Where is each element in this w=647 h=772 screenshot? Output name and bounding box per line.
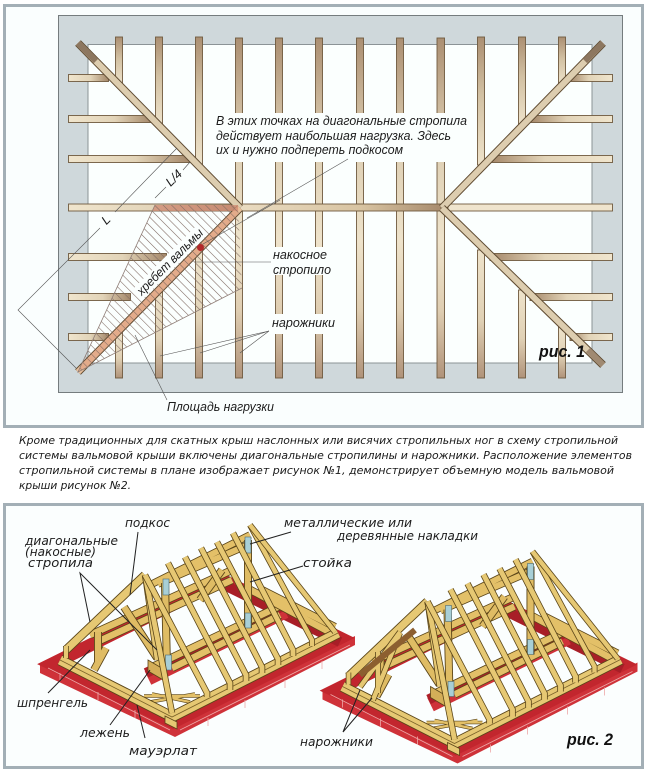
label: plates: деревянные накладки — [336, 529, 478, 543]
label: plates — [250, 516, 478, 544]
rafters — [66, 525, 335, 713]
common rafters, vertical — [116, 37, 566, 378]
label: diagonal rafters — [24, 534, 157, 650]
panel: roof plan — [4, 6, 642, 426]
callout: load points: действует наибольшая нагрузка. Здесь — [216, 129, 451, 143]
ridge beam — [150, 535, 250, 585]
text block: description — [19, 434, 632, 492]
label: post: стойка — [303, 556, 352, 570]
roof outline — [58, 16, 622, 392]
label: creepers: нарожники — [272, 316, 335, 330]
dimension L/4: L/4 — [163, 167, 185, 189]
common rafters, horizontal — [68, 74, 612, 340]
label: creepers in model 2 — [300, 690, 373, 749]
label: truss — [17, 650, 90, 710]
load area hatching — [79, 205, 242, 371]
label: sill: лежень — [79, 726, 130, 740]
label: diagonal rafters: диагональные — [24, 534, 118, 548]
label: diagonal rafters: стропила — [28, 556, 93, 570]
3D roof model 2 — [322, 552, 638, 764]
label: creepers — [160, 314, 336, 356]
label: strut — [125, 516, 170, 595]
brick ring — [40, 636, 355, 737]
callout: load points: В этих точках на диагональные стропила — [216, 114, 467, 128]
label: jack rafter: накосное — [273, 248, 327, 262]
label: plates: металлические или — [284, 516, 412, 530]
label: jack rafter — [195, 247, 331, 277]
figure label 1: рис. 1 — [538, 342, 585, 361]
dimension L: L — [99, 213, 113, 227]
callout: load points: их и нужно подпереть подкосом — [216, 143, 403, 157]
metal plates — [163, 537, 251, 670]
creeper rafters — [360, 630, 415, 700]
3D roof model 1 — [40, 525, 355, 737]
label: load area — [135, 335, 274, 414]
posts and braces — [94, 540, 248, 670]
panel: 3D models — [4, 504, 642, 768]
text block: description: стропильной системы в плане изображает рисунок №1, демонстрирует объемную модель вальмовой — [19, 464, 614, 477]
ridge beam — [240, 204, 441, 211]
text block: description: системы вальмовой крыши включены диагональные стропилины и нарожники. Расположение элементов — [19, 449, 632, 462]
ridge label: hip ridge: хребет вальмы — [133, 226, 206, 299]
text block: description: Кроме традиционных для скатных крыш наслонных или висячих стропильных ног в схему стропильной — [19, 434, 618, 447]
figure label 2: рис. 2 — [566, 730, 614, 749]
dimension L — [18, 148, 177, 368]
hip rafters — [78, 43, 603, 372]
back beams — [90, 570, 335, 702]
callout: load points — [203, 113, 470, 244]
label: wall plate — [129, 705, 198, 758]
label: diagonal rafters: (накосные) — [25, 545, 96, 559]
label: strut: подкос — [125, 516, 170, 530]
label: sill — [79, 670, 150, 740]
label: load area: Площадь нагрузки — [167, 400, 274, 414]
label: jack rafter: стропило — [273, 263, 331, 277]
label: truss: шпренгель — [17, 696, 88, 710]
text block: description: крыши рисунок №2. — [19, 479, 131, 492]
label: wall plate: мауэрлат — [129, 744, 198, 758]
label: post — [250, 556, 352, 582]
label: creepers in model 2: нарожники — [300, 735, 373, 749]
wall plate — [60, 633, 338, 729]
red load point — [197, 244, 204, 251]
dimension L/4 — [155, 162, 190, 198]
building footprint — [88, 44, 592, 363]
